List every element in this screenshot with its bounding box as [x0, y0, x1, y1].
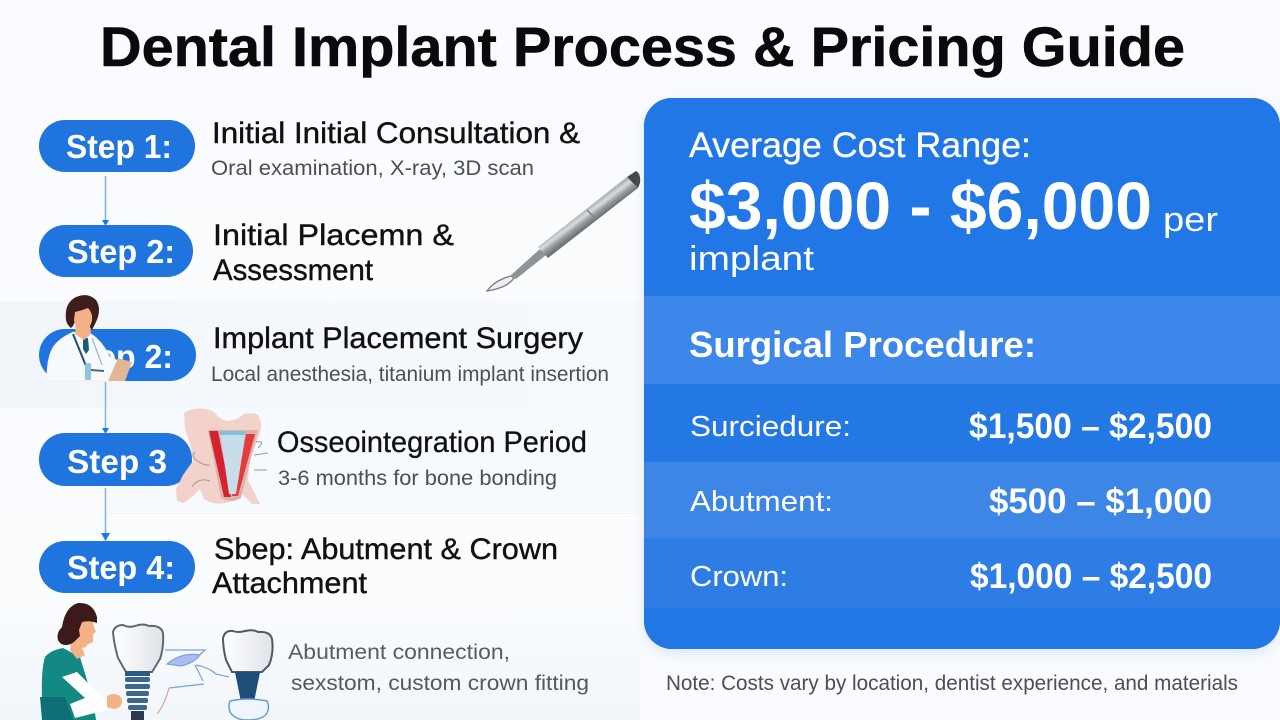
step 1 badge: [39, 120, 195, 172]
step 3 badge: [39, 433, 192, 486]
step 4 badge: [39, 541, 195, 593]
row: abutment cost: [690, 482, 1212, 521]
step 2 surgery badge: Step 2:: [66, 338, 173, 375]
step 2 badge: [39, 225, 193, 277]
step 3 text: [277, 426, 587, 490]
icon: doctor: [47, 295, 132, 381]
step 2 surgery badge: [39, 329, 196, 381]
icon: connector sketch: [157, 650, 229, 714]
step 4 detail text: [288, 641, 589, 695]
step 2 surgery text: [211, 322, 609, 386]
timeline connectors: [101, 176, 110, 541]
row: crown cost: [690, 557, 1212, 596]
step 4 detail text: sexstom, custom crown fitting: [291, 672, 589, 695]
row: surgery cost: Surciedure:: [690, 411, 851, 443]
step 2 badge: Step 2:: [67, 233, 175, 270]
row: abutment cost: Abutment:: [690, 486, 833, 518]
row: abutment cost: $500 – $1,000: [989, 482, 1212, 521]
step 4 text: Sbep: Abutment & Crown: [214, 533, 558, 566]
row: crown cost: $1,000 – $2,500: [970, 557, 1212, 596]
cost range value: $3,000 - $6,000: [689, 169, 1152, 244]
step 2 text: [213, 219, 454, 287]
row: crown cost: Crown:: [690, 561, 788, 593]
panel: pricing: [644, 98, 1280, 649]
per implant label: implant: [689, 240, 815, 278]
row: surgery cost: [690, 407, 1212, 446]
note: Note: Costs vary by location, dentist experience, and materials: [666, 672, 1238, 695]
icon: crown with abutment: [223, 630, 273, 720]
step 4 detail text: Abutment connection,: [288, 641, 510, 664]
step 3 text: 3-6 months for bone bonding: [278, 467, 557, 490]
icon: implant in bone cross-section: [176, 408, 268, 504]
step 2 surgery text: Implant Placement Surgery: [213, 322, 583, 355]
icon: implant with crown: [113, 624, 163, 720]
title: Dental Implant Process & Pricing Guide: [100, 15, 1185, 78]
step 2 text: Initial Placemn &: [213, 219, 454, 252]
step 1 text: Initial Initial Consultation &: [212, 117, 580, 150]
icon: dental tool: [487, 171, 640, 291]
per implant label: [689, 201, 1218, 278]
surgical procedure heading: Surgical Procedure:: [689, 324, 1036, 365]
step 4 text: Attachment: [212, 567, 368, 600]
step 1 badge: Step 1:: [66, 128, 172, 165]
icon: patient: [40, 603, 122, 720]
average cost heading: Average Cost Range:: [689, 126, 1031, 165]
per implant label: per: [1163, 201, 1218, 239]
step 4 badge: Step 4:: [67, 549, 175, 586]
step 2 text: Assessment: [213, 254, 374, 287]
row: surgery cost: $1,500 – $2,500: [969, 407, 1212, 446]
step 1 text: Oral examination, X-ray, 3D scan: [211, 157, 534, 180]
step 2 surgery text: Local anesthesia, titanium implant insertion: [211, 363, 609, 386]
step 3 badge: Step 3: [67, 443, 167, 480]
step 1 text: [211, 117, 580, 180]
step 3 text: Osseointegration Period: [277, 426, 587, 459]
step 4 text: [212, 533, 558, 600]
